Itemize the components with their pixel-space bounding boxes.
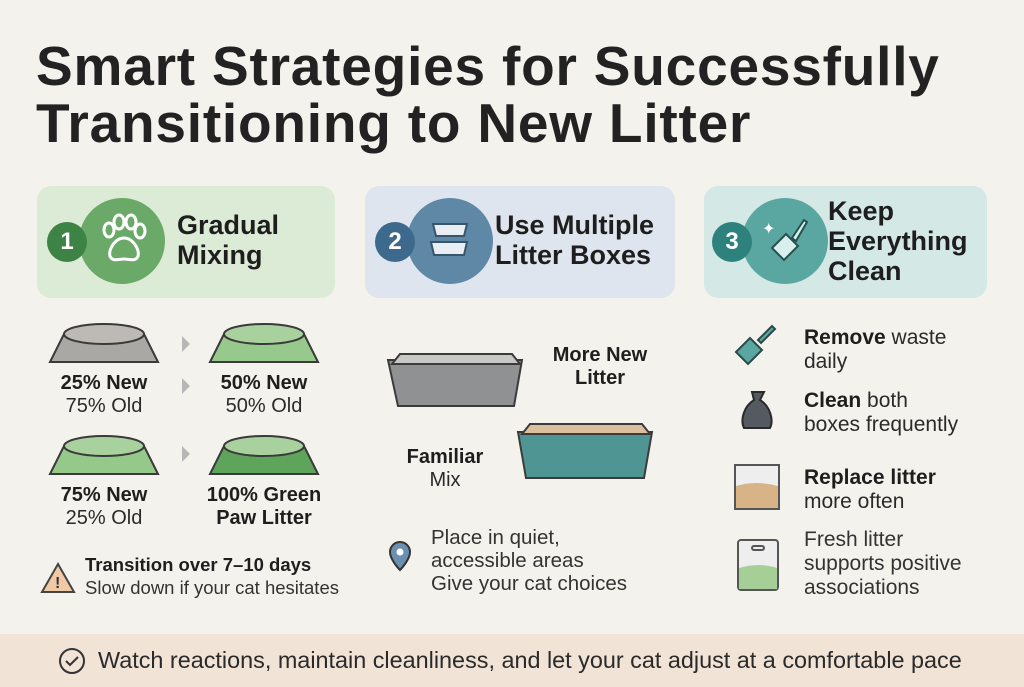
warning note: Transition over 7–10 days	[85, 554, 311, 575]
icon: scoop	[734, 324, 776, 366]
heading: Use Multiple	[495, 210, 654, 240]
label 100: Paw Litter	[216, 507, 312, 529]
panel: gradual mixing header	[37, 186, 335, 298]
cleaning list: boxes frequently	[804, 413, 958, 436]
label more new: More New	[553, 344, 647, 366]
cleaning list: supports positive	[804, 552, 962, 575]
title: Transitioning to New Litter	[36, 92, 751, 154]
badge 3: 3	[725, 228, 739, 255]
footer banner: Watch reactions, maintain cleanliness, and let your cat adjust at a comfortable pace	[98, 647, 962, 673]
icon: scoop circle: ✦	[762, 221, 775, 238]
badge 1	[47, 222, 87, 262]
placement note: accessible areas	[431, 549, 584, 572]
placement note	[389, 526, 627, 595]
label more new: Litter	[575, 367, 625, 389]
placement note: Place in quiet,	[431, 526, 560, 549]
panel: multiple boxes header	[365, 186, 675, 298]
footer banner	[0, 634, 1024, 687]
badge 2: 2	[388, 228, 402, 255]
label 100	[207, 484, 321, 529]
icon: paw circle	[79, 198, 165, 284]
cleaning list: daily	[804, 350, 847, 373]
label 25: 75% Old	[66, 395, 142, 417]
label 75	[61, 484, 148, 529]
litter boxes illustration	[386, 344, 654, 491]
label 75: 25% Old	[66, 507, 142, 529]
bowls grid	[48, 323, 321, 529]
heading	[495, 210, 654, 270]
heading: Clean	[828, 256, 902, 286]
placement note: Give your cat choices	[431, 572, 627, 595]
label 50	[221, 372, 308, 417]
icon: fresh bag	[737, 539, 779, 591]
icon: check	[59, 648, 85, 674]
heading: Gradual	[177, 210, 279, 240]
label 100: 100% Green	[207, 484, 321, 506]
label 50: 50% New	[221, 372, 307, 394]
badge 3	[712, 222, 752, 262]
cleaning list: Remove waste	[804, 326, 946, 349]
label 25	[61, 372, 148, 417]
warning note: !	[55, 575, 60, 592]
heading: Everything	[828, 226, 968, 256]
badge 1: 1	[60, 228, 74, 255]
label familiar	[407, 446, 483, 491]
cleaning list: Fresh litter	[804, 528, 903, 551]
cleaning list: Replace litter	[804, 466, 936, 489]
panel: clean header	[704, 186, 987, 298]
label 25: 25% New	[61, 372, 147, 394]
badge 2	[375, 222, 415, 262]
label 50: 50% Old	[226, 395, 302, 417]
cleaning list: Clean both	[804, 389, 908, 412]
warning note: Slow down if your cat hesitates	[85, 577, 339, 598]
icon: litter bag	[734, 464, 780, 510]
icon: scoop circle	[742, 198, 828, 284]
icon: boxes circle	[407, 198, 493, 284]
icon: bag	[741, 391, 773, 429]
heading	[828, 196, 968, 286]
title: Smart Strategies for Successfully	[36, 35, 940, 97]
heading: Keep	[828, 196, 894, 226]
label familiar: Mix	[429, 469, 461, 491]
heading: Mixing	[177, 240, 262, 270]
heading	[177, 210, 279, 270]
label familiar: Familiar	[407, 446, 483, 468]
label 75: 75% New	[61, 484, 147, 506]
label more new	[553, 344, 648, 389]
warning note	[40, 554, 339, 598]
cleaning list: associations	[804, 576, 920, 599]
cleaning list	[734, 324, 962, 599]
title	[36, 35, 940, 154]
cleaning list: more often	[804, 490, 904, 513]
heading: Litter Boxes	[495, 240, 651, 270]
